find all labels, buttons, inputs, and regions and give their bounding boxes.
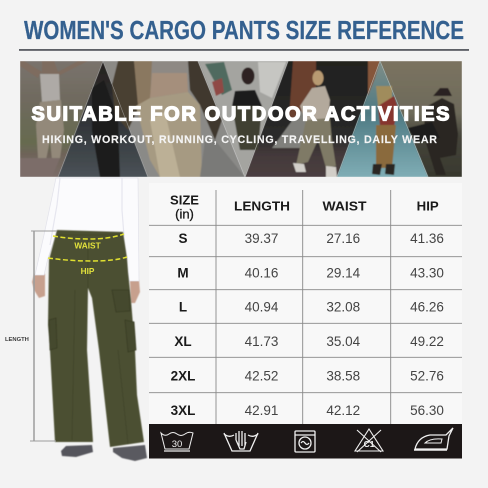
size S row: S (178, 231, 188, 246)
size L row: 46.26 (410, 300, 444, 315)
size 3XL row (171, 403, 444, 418)
waist measure line (53, 234, 124, 239)
size L row: 32.08 (326, 300, 360, 315)
size L row (179, 300, 444, 315)
size XL row: 35.04 (326, 334, 361, 349)
care instructions strip (149, 424, 462, 458)
size 3XL row: 42.91 (245, 403, 278, 418)
hip measure line (48, 257, 127, 261)
size XL row: 41.73 (245, 334, 278, 349)
size 2XL row: 2XL (171, 369, 195, 384)
building (289, 61, 316, 118)
size L row: L (179, 300, 187, 315)
length measure (30, 231, 57, 441)
size table (149, 183, 462, 424)
size 2XL row: 38.58 (326, 369, 360, 384)
length label: LENGTH (5, 337, 29, 343)
icon: do not bleach: C1 (364, 439, 375, 449)
size S row (178, 231, 444, 246)
dark figure (92, 80, 120, 177)
size 2XL row: 52.76 (410, 369, 444, 384)
seated man (424, 98, 458, 175)
woman 5 (272, 110, 310, 148)
size M row (177, 265, 444, 280)
table header: WAIST (322, 198, 367, 213)
woman 1 (20, 61, 86, 76)
olive pants (48, 230, 144, 447)
icon: washing machine (295, 431, 315, 452)
icon: hand wash (224, 431, 258, 451)
icon: iron (414, 428, 453, 450)
banner heading: SUITABLE FOR OUTDOOR ACTIVITIES (32, 103, 450, 125)
banner: outdoor activities (20, 61, 462, 177)
size S row: 41.36 (410, 231, 444, 246)
size XL row: XL (174, 334, 192, 349)
table header: SIZE (170, 192, 199, 207)
table header: (in) (175, 206, 194, 222)
woman 3: jacket, midriff and pants (112, 61, 140, 130)
size 2XL row: 42.52 (245, 369, 278, 384)
size S row: 27.16 (326, 231, 360, 246)
table header (170, 192, 439, 222)
hands (32, 274, 140, 303)
size 3XL row: 3XL (171, 403, 195, 418)
shoes (61, 445, 147, 461)
size S row: 39.37 (245, 231, 278, 246)
size M row: 29.14 (326, 265, 361, 280)
size M row: 43.30 (410, 265, 444, 280)
size 3XL row: 42.12 (326, 403, 360, 418)
white shirt (35, 178, 139, 281)
banner subheading: HIKING, WORKOUT, RUNNING, CYCLING, TRAVELLING, DAILY WEAR (42, 134, 437, 146)
hip label: HIP (81, 266, 95, 276)
table header: HIP (417, 198, 439, 213)
icon: wash at 30 degrees (161, 432, 193, 451)
model wearing cargo pants with measurements (5, 178, 147, 461)
woman 4 (232, 90, 262, 106)
size XL row (174, 334, 444, 349)
table header: LENGTH (234, 198, 290, 213)
icon: wash at 30 degrees: 30 (172, 439, 182, 450)
size M row: M (177, 265, 189, 280)
size XL row: 49.22 (410, 334, 444, 349)
size L row: 40.94 (245, 300, 279, 315)
woman 6 (376, 86, 392, 108)
icon: do not bleach (355, 429, 383, 452)
size 2XL row (171, 369, 444, 384)
size M row: 40.16 (245, 265, 278, 280)
waist label: WAIST (74, 240, 101, 250)
size 3XL row: 56.30 (410, 403, 444, 418)
